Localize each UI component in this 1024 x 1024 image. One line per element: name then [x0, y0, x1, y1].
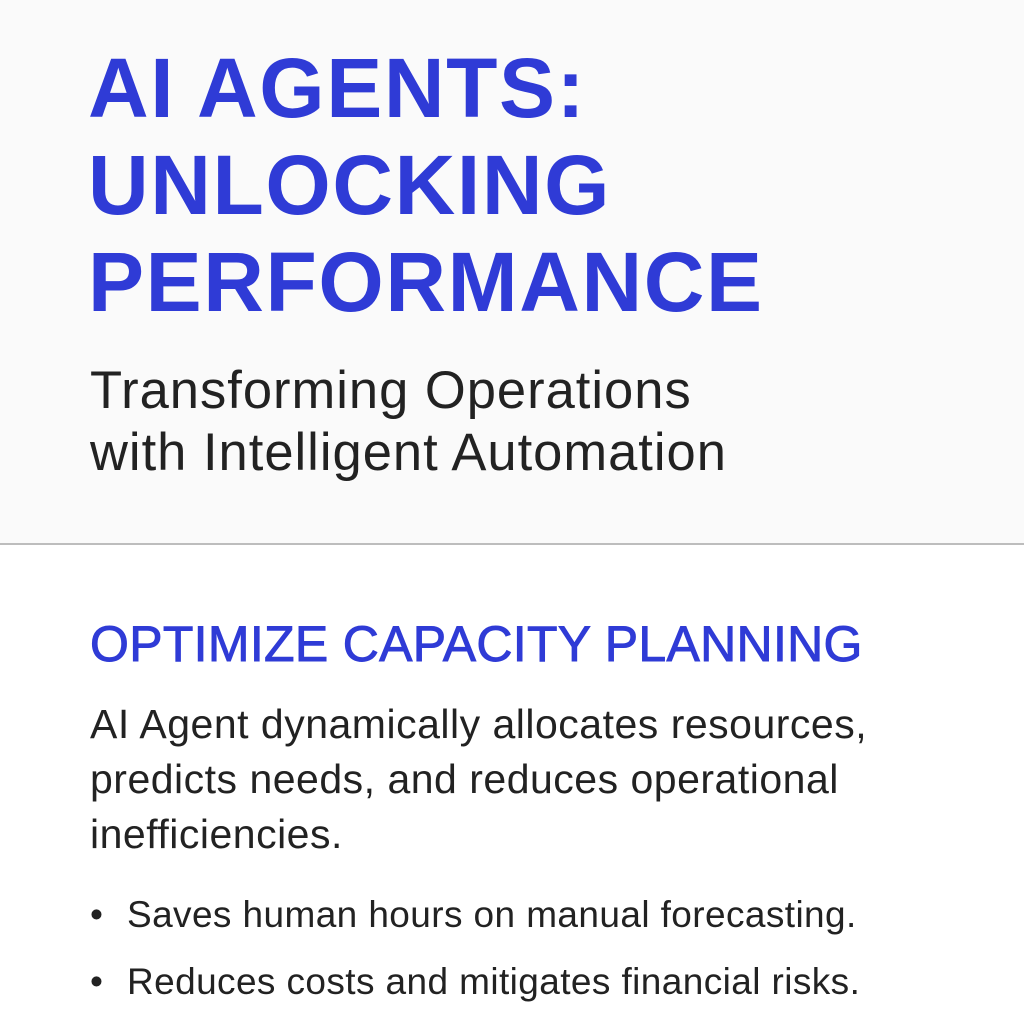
subtitle	[90, 361, 727, 482]
title: UNLOCKING	[88, 138, 611, 232]
bullet list: •	[90, 961, 103, 1002]
body text: AI Agent dynamically allocates resources,	[90, 701, 867, 747]
body text	[90, 701, 867, 857]
subtitle: with Intelligent Automation	[90, 423, 727, 482]
title: AI AGENTS:	[88, 41, 586, 135]
section heading: OPTIMIZE CAPACITY PLANNING	[90, 616, 863, 672]
title: PERFORMANCE	[88, 235, 764, 329]
bullet list	[90, 894, 860, 1002]
header band	[0, 0, 1024, 545]
bullet list: •	[90, 894, 103, 935]
bullet list: Reduces costs and mitigates financial risks.	[127, 961, 860, 1002]
body text: predicts needs, and reduces operational	[90, 756, 839, 802]
bullet list: Saves human hours on manual forecasting.	[127, 894, 857, 935]
body text: inefficiencies.	[90, 811, 343, 857]
subtitle: Transforming Operations	[90, 361, 692, 420]
title	[88, 41, 764, 329]
